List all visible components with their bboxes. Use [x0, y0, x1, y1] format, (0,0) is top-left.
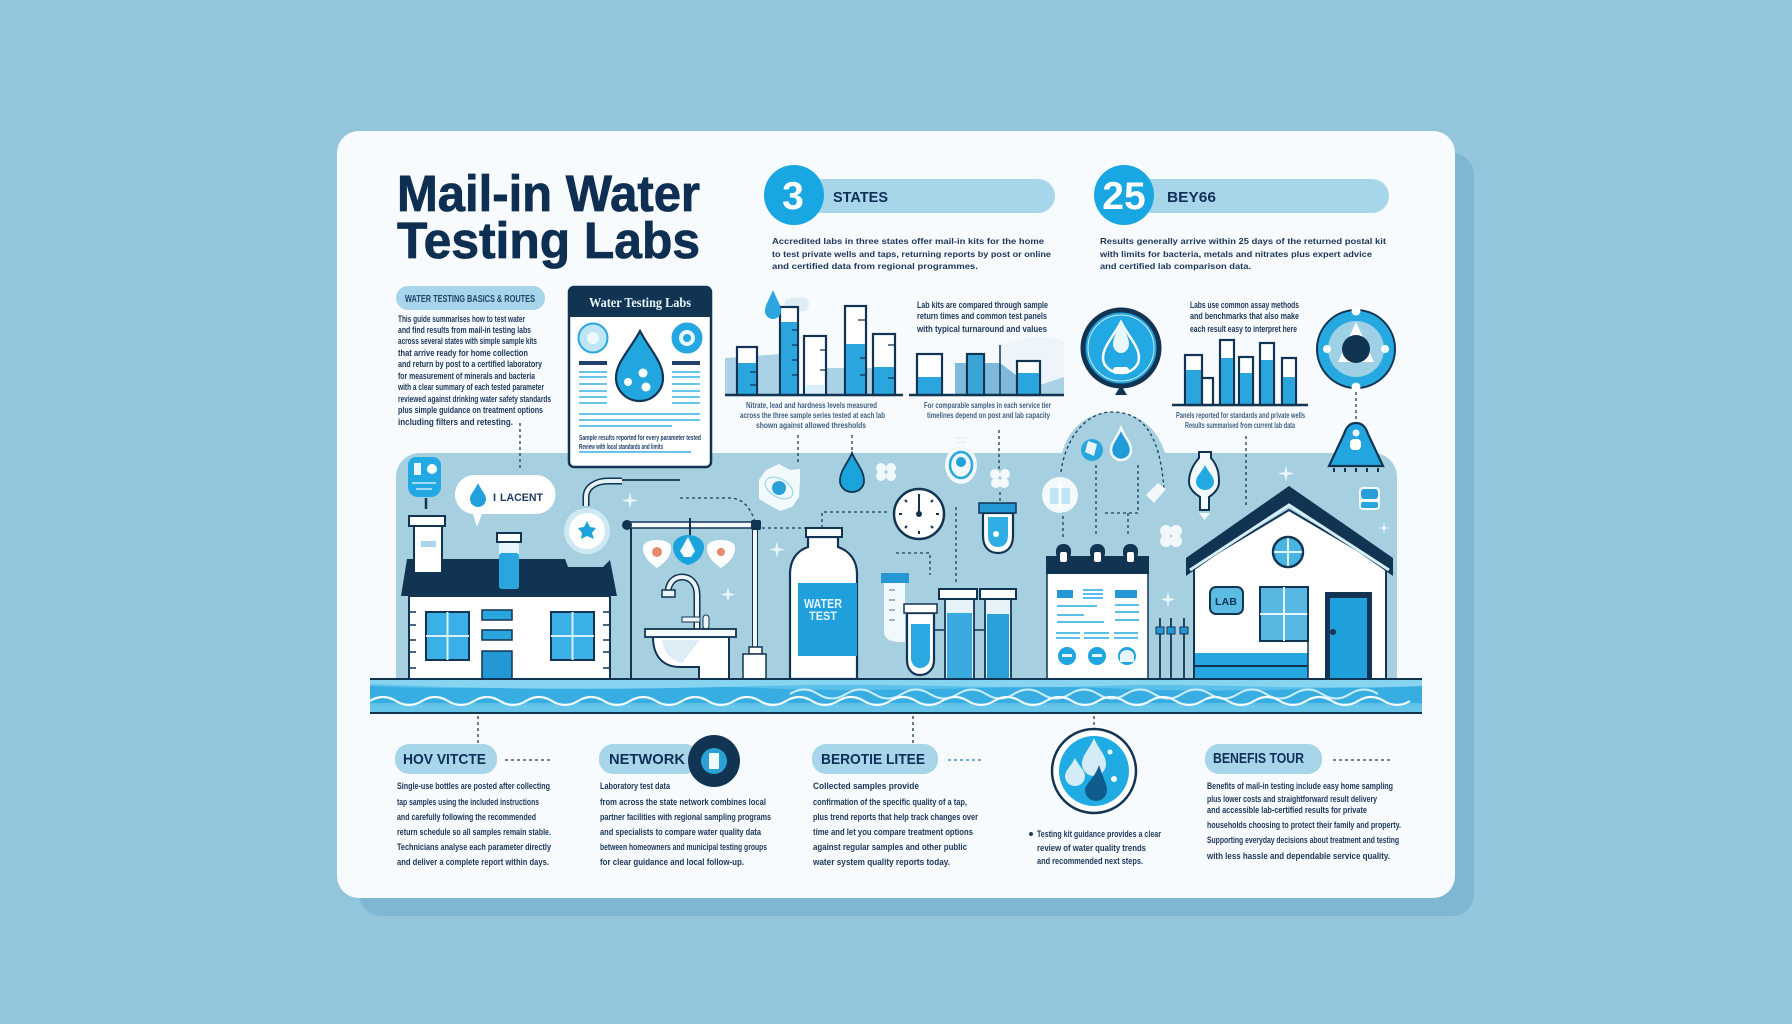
speech bubble: label: I [493, 492, 496, 504]
title: Mail-in Water [397, 165, 700, 222]
house body [1194, 510, 1386, 679]
icon: clover [1160, 525, 1182, 547]
sparkles [622, 465, 1390, 607]
column text: Technicians analyse each parameter directly [397, 842, 551, 852]
icon: ball [1081, 439, 1103, 461]
clock [894, 489, 944, 539]
icon: test badge [408, 457, 441, 509]
stat: 25 days [1094, 165, 1389, 225]
icon: small badge [1359, 487, 1380, 510]
bottom column 4 [1205, 744, 1401, 861]
icon: blob [1146, 483, 1166, 503]
column text: plus lower costs and straightforward result delivery [1207, 794, 1377, 804]
title: Testing Labs [397, 212, 700, 269]
tall cup B [980, 589, 1016, 679]
column text: and carefully following the recommended [397, 812, 536, 822]
syringe tube [881, 573, 909, 642]
chart 2 note text: with typical turnaround and values [916, 324, 1047, 334]
water report document: Review with local standards and limits [579, 444, 663, 451]
scene dashed connectors [478, 392, 1356, 745]
heading pill: HOV VITCTE [403, 751, 486, 768]
stat: 3 states: STATES [833, 189, 888, 206]
speech bubble: label: LACENT [500, 492, 543, 504]
card shadow [359, 153, 1474, 916]
column text: partner facilities with regional sampling programs [600, 812, 771, 822]
column text: and deliver a complete report within days. [397, 857, 549, 867]
intro heading pill: WATER TESTING BASICS & ROUTES [405, 294, 535, 305]
stat: 3 states [764, 165, 1055, 225]
stat: 25 description: with limits for bacteria, metals and nitrates plus expert advice [1099, 249, 1372, 259]
icon: white circle [1042, 477, 1078, 513]
water band [370, 679, 1422, 713]
column text: time and let you compare treatment options [813, 827, 973, 837]
house left [401, 516, 617, 679]
bar chart 3 [1172, 340, 1308, 405]
bar chart 2 [909, 337, 1064, 395]
basin [645, 629, 736, 679]
title [397, 165, 700, 269]
bottom column 3 [812, 744, 982, 867]
column text [1206, 781, 1401, 861]
stat: 3 states description [772, 236, 1051, 271]
door [1325, 592, 1372, 679]
bottom column 1 [395, 744, 553, 867]
intro body text: and find results from mail-in testing labs [398, 325, 531, 335]
intro body text: including filters and retesting. [398, 417, 513, 427]
icon: drops circle [1052, 729, 1136, 813]
chart 3 note text: Labs use common assay methods [1190, 300, 1299, 310]
water report document: Sample results reported for every parameter tested [579, 435, 701, 442]
intro heading pill [396, 286, 545, 310]
water report document: Water Testing Labs [589, 296, 691, 311]
tall cup A [939, 589, 977, 679]
windows [426, 612, 469, 660]
icon: sample cup [979, 503, 1016, 553]
chart 2 note text: return times and common test panels [917, 311, 1047, 321]
intro body text: for measurement of minerals and bacteria [398, 371, 536, 381]
icon: drop bottle [1189, 452, 1219, 520]
stat: 25 description: Results generally arrive within 25 days of the returned postal kit [1100, 236, 1386, 246]
main card [337, 131, 1455, 898]
column text: Collected samples provide [813, 781, 919, 791]
column text: Laboratory test data [600, 781, 671, 791]
column text: return schedule so all samples remain stable. [397, 827, 551, 837]
water test bottle: WATER [804, 596, 842, 611]
house right [1186, 486, 1393, 679]
intro body text: across several states with simple sample kits [398, 336, 537, 346]
water report document [569, 287, 711, 467]
icon: network circle [688, 735, 740, 787]
house body [409, 596, 610, 679]
column text: with less hassle and dependable service quality. [1206, 851, 1390, 861]
drops caption: and recommended next steps. [1037, 856, 1143, 866]
illustrated scene panel [396, 412, 1397, 680]
column text: for clear guidance and local follow-up. [600, 857, 744, 867]
chart 3 caption [1176, 411, 1305, 430]
column text: from across the state network combines local [600, 797, 766, 807]
heading pill: BENEFIS TOUR [1213, 750, 1304, 767]
chart 2 caption [924, 401, 1051, 420]
roof test tube [497, 533, 521, 589]
water test bottle: TEST [809, 609, 838, 623]
sign [1210, 587, 1243, 614]
faucet [662, 577, 709, 629]
stat: 25 days: 25 [1102, 175, 1146, 218]
water drop [616, 331, 663, 401]
column text: Supporting everyday decisions about treatment and testing [1207, 835, 1399, 845]
column text: between homeowners and municipal testing groups [600, 842, 767, 852]
chart 1 caption: Nitrate, lead and hardness levels measured [746, 401, 877, 410]
intro body text [397, 314, 551, 427]
test tube [904, 604, 937, 675]
column text [812, 781, 978, 867]
chart 1 caption [740, 401, 885, 430]
icon: circular target [1317, 306, 1395, 392]
dome icons [1042, 428, 1182, 547]
heading pill: BEROTIE LITEE [821, 751, 925, 768]
door [482, 651, 512, 679]
chart 3 note text: and benchmarks that also make [1190, 311, 1299, 321]
intro body text: plus simple guidance on treatment options [398, 405, 543, 415]
intro body text: and return by post to a certified laboratory [398, 359, 542, 369]
window [1260, 587, 1308, 641]
stat: 25 days: BEY66 [1167, 189, 1216, 206]
hearts [643, 535, 735, 568]
chart 3 caption: Panels reported for standards and private wells [1176, 411, 1305, 420]
chart 2 caption: For comparable samples in each service tier [924, 401, 1051, 410]
column text: plus trend reports that help track changes over [813, 812, 978, 822]
chart 2 note text [916, 300, 1048, 334]
stat: 3 states description: and certified data from regional programmes. [772, 261, 978, 271]
column text: against regular samples and other public [813, 842, 967, 852]
intro body text: that arrive ready for home collection [398, 348, 528, 358]
calendar report [1046, 544, 1149, 679]
chart 3 note text: each result easy to interpret here [1190, 324, 1297, 334]
chart 2 caption: timelines depend on post and lab capacity [927, 411, 1050, 420]
speech bubble: label [455, 475, 556, 527]
icon: magnifier with drop [1083, 310, 1159, 395]
column text: Single-use bottles are posted after collecting [397, 781, 550, 791]
drops caption: Testing kit guidance provides a clear [1037, 829, 1161, 839]
base band [1195, 587, 1308, 679]
column text: water system quality reports today. [812, 857, 950, 867]
stat: 25 description: and certified lab comparison data. [1100, 261, 1251, 271]
chart 1 caption: shown against allowed thresholds [756, 421, 866, 430]
icon: drop in dome [1111, 428, 1131, 460]
icon: flower 1 [876, 463, 896, 481]
heading pill [1205, 744, 1322, 774]
test tubes group [881, 573, 1016, 679]
intro body text: with a clear summary of each tested parameter [397, 382, 544, 392]
test strips [1156, 618, 1188, 679]
intro panel [396, 286, 551, 427]
sink frame [622, 518, 766, 679]
heading pill [812, 744, 938, 774]
column text: and specialists to compare water quality data [600, 827, 762, 837]
icon: drop [840, 453, 864, 492]
bottom column 2 [599, 735, 771, 867]
stat: 3 states description: to test private wells and taps, returning reports by post or online [772, 249, 1051, 259]
column text: confirmation of the specific quality of a tap, [813, 797, 967, 807]
drops caption: review of water quality trends [1037, 843, 1146, 853]
heading pill: NETWORK [609, 751, 685, 768]
roof [1186, 486, 1393, 576]
sign: LAB [1215, 597, 1237, 608]
chimney [409, 516, 445, 573]
intro body text: This guide summarises how to test water [398, 314, 525, 324]
icon: flask ring [945, 438, 977, 484]
pipe with gauge [564, 480, 680, 554]
drops caption [1029, 829, 1161, 866]
round window [1273, 537, 1303, 567]
icon: flower 2 [990, 469, 1010, 488]
chart 1 caption: across the three sample series tested at each lab [740, 411, 885, 420]
roof [401, 559, 617, 596]
stat: 3 states: 3 [782, 175, 804, 218]
bar chart 1: test tubes [725, 290, 903, 395]
column text: and accessible lab-certified results for private [1207, 805, 1367, 815]
heading pill [395, 744, 497, 774]
column text [397, 781, 551, 867]
column text: tap samples using the included instructions [397, 797, 539, 807]
water test bottle [790, 528, 857, 679]
column text: Benefits of mail-in testing include easy home sampling [1207, 781, 1393, 791]
icon: drop on chart [765, 290, 781, 319]
icon: bell [1329, 423, 1383, 472]
column text [600, 781, 771, 867]
stat: 3 states description: Accredited labs in three states offer mail-in kits for the home [772, 236, 1044, 246]
intro body text: reviewed against drinking water safety standards [398, 394, 551, 404]
stat: 25 description [1099, 236, 1386, 271]
column text: households choosing to protect their family and property. [1207, 820, 1401, 830]
chart 2 note text: Lab kits are compared through sample [917, 300, 1048, 310]
icon: atom [759, 464, 800, 511]
chart 3 caption: Results summarised from current lab data [1185, 421, 1295, 430]
chart 3 note text [1190, 300, 1299, 334]
heading pill [599, 744, 699, 774]
